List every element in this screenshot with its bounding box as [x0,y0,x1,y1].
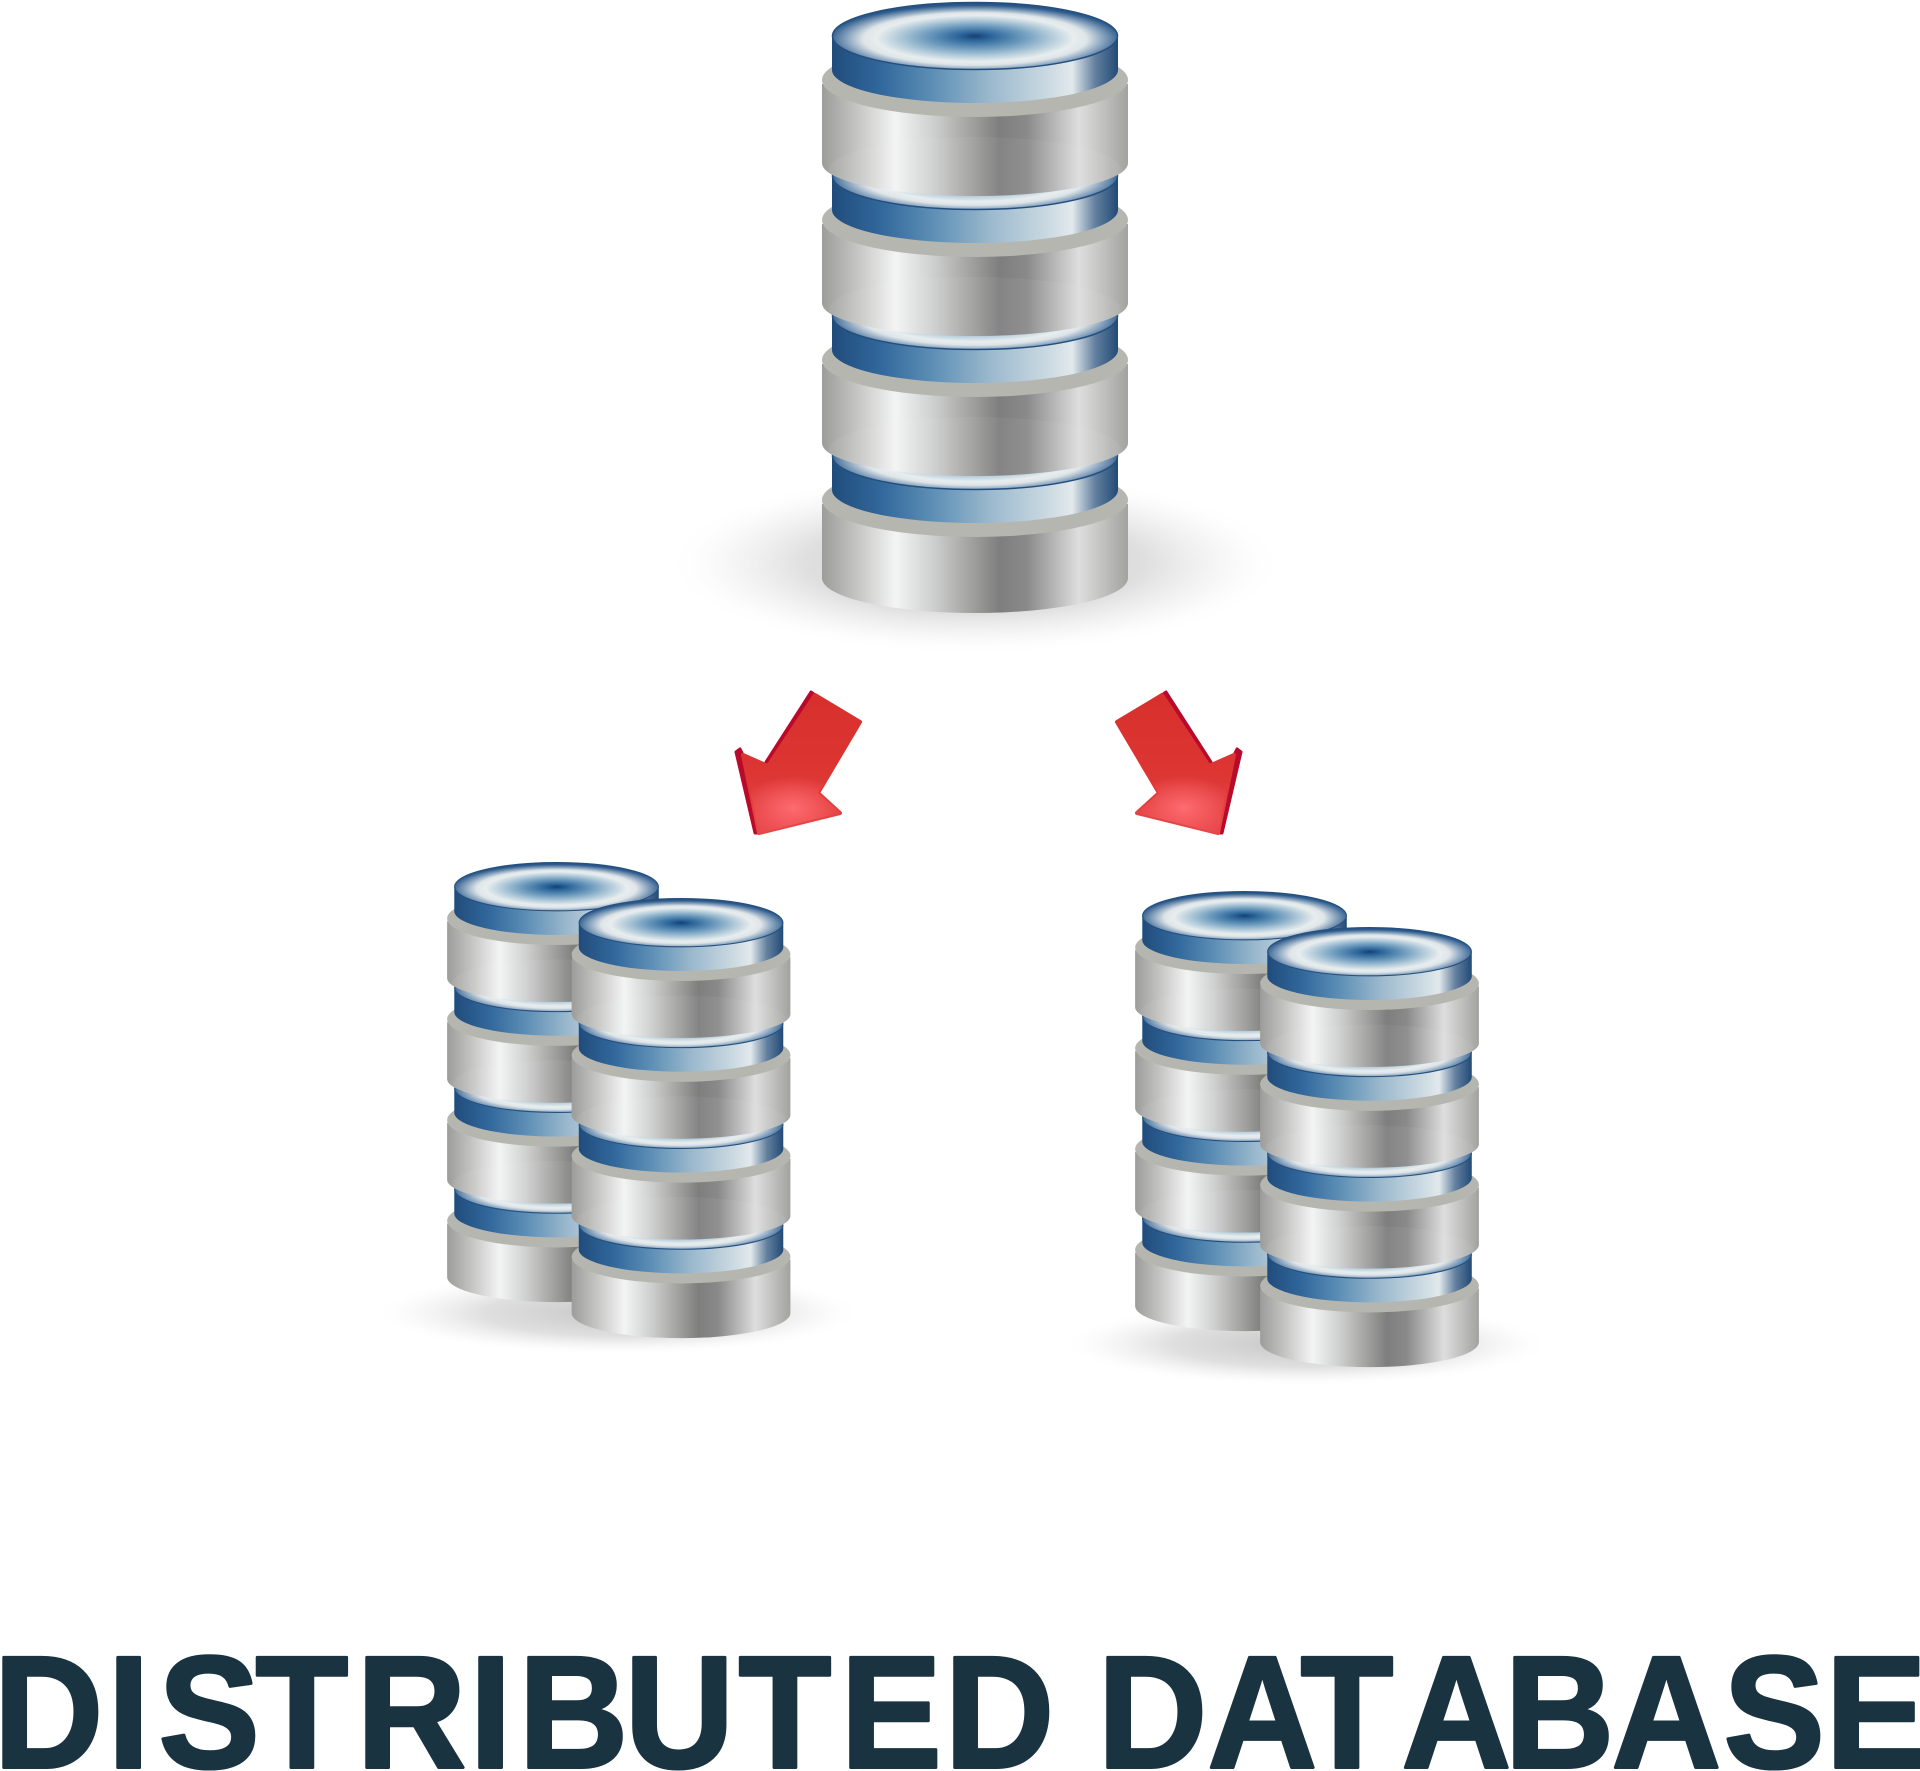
icon: right database pair [1135,892,1479,1367]
right pair rear cylinder [1135,892,1354,1331]
icon: main database cylinder [822,2,1128,613]
left pair front cylinder [572,899,790,1338]
right pair front cylinder [1260,928,1479,1367]
icon: left database pair [447,863,790,1338]
shadow: left database pair [373,1271,863,1355]
shadow: top database [665,471,1285,655]
left pair rear cylinder [447,863,666,1302]
shadow: right database pair [1061,1302,1551,1386]
arrow: to left database pair [736,692,860,840]
arrow: to right database pair [1117,692,1241,840]
